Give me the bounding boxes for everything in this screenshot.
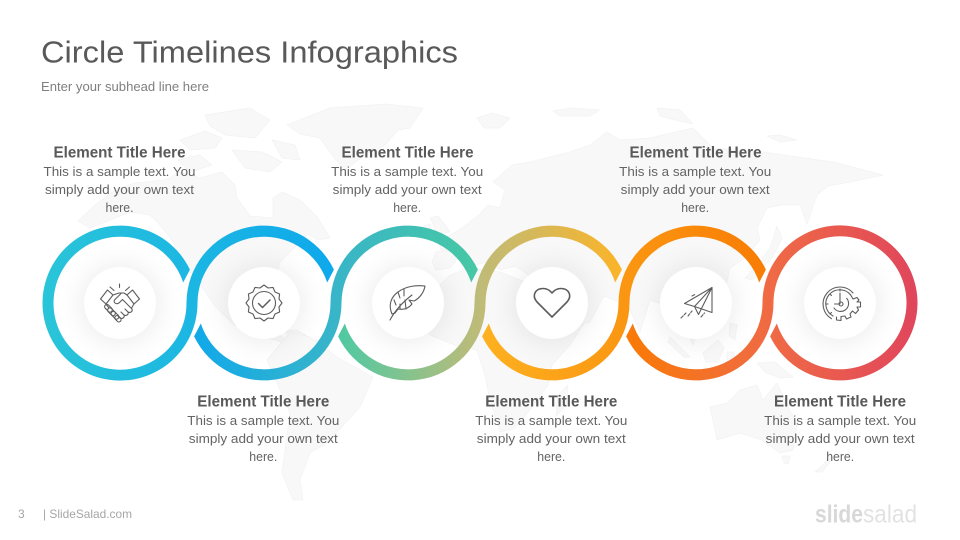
element 2 body: here. <box>249 449 277 464</box>
element 3 body: simply add your own text <box>333 182 482 197</box>
element 4 body: This is a sample text. You <box>475 413 627 428</box>
element 6 body: here. <box>826 449 854 464</box>
icon: badge check <box>246 285 282 321</box>
element 2 body <box>187 413 339 464</box>
disk 3 with feather icon <box>348 244 468 364</box>
element 4 body <box>475 413 627 464</box>
element 3 heading: Element Title Here <box>342 144 474 162</box>
element 1 body: simply add your own text <box>45 182 194 197</box>
element 1 heading: Element Title Here <box>54 144 186 162</box>
element 5 heading: Element Title Here <box>630 144 762 162</box>
disk 6 with gauge gear icon <box>780 244 900 364</box>
element 6 heading: Element Title Here <box>774 394 906 410</box>
logo: slidesalad: salad <box>863 500 917 528</box>
element 1 body: here. <box>106 200 134 215</box>
text block: element 4 <box>475 394 627 464</box>
element 1 body <box>44 164 196 215</box>
element 5 body: This is a sample text. You <box>619 164 771 179</box>
ring segment 1 <box>43 226 334 381</box>
element 6 body: simply add your own text <box>766 431 915 446</box>
icon: gauge gear <box>823 287 860 320</box>
disk 5 with paper plane icon <box>636 244 756 364</box>
element 4 body: simply add your own text <box>477 431 626 446</box>
ring segment 2 <box>194 226 478 380</box>
logo: slidesalad: slide <box>815 500 863 528</box>
element 2 heading: Element Title Here <box>197 394 329 410</box>
disk 4 with heart icon <box>492 244 612 364</box>
icon: heart <box>534 288 570 317</box>
element 3 body <box>331 164 483 215</box>
text block: element 2 <box>187 394 339 464</box>
logo: slidesalad <box>815 500 917 528</box>
element 5 body: here. <box>681 200 709 215</box>
element 4 body: here. <box>537 449 565 464</box>
subhead: Enter your subhead line here <box>41 80 209 94</box>
element 6 body <box>764 413 916 464</box>
element 3 body: here. <box>393 200 421 215</box>
ring segment 3 <box>338 226 622 380</box>
element 5 body <box>619 164 771 215</box>
icon: paper plane <box>681 288 712 318</box>
icon: handshake <box>100 284 140 323</box>
ring segment 5 <box>626 225 917 380</box>
page number: 3 <box>18 507 25 521</box>
text block: element 6 <box>764 394 916 464</box>
element 5 body: simply add your own text <box>621 182 770 197</box>
element 2 body: simply add your own text <box>189 431 338 446</box>
text block: element 1 <box>44 144 196 215</box>
element 6 body: This is a sample text. You <box>764 413 916 428</box>
footer site name: | SlideSalad.com <box>43 507 132 521</box>
text block: element 3 <box>331 144 483 215</box>
element 3 body: This is a sample text. You <box>331 164 483 179</box>
icon: feather <box>390 286 425 320</box>
world map background <box>78 104 883 500</box>
disk 1 with handshake icon <box>60 244 180 364</box>
ring segment 4 <box>482 226 766 380</box>
element 4 heading: Element Title Here <box>485 394 617 410</box>
title: Circle Timelines Infographics <box>41 34 458 70</box>
element 2 body: This is a sample text. You <box>187 413 339 428</box>
element 1 body: This is a sample text. You <box>44 164 196 179</box>
disk 2 with badge icon <box>204 244 324 364</box>
timeline rings <box>43 225 917 381</box>
text block: element 5 <box>619 144 771 215</box>
